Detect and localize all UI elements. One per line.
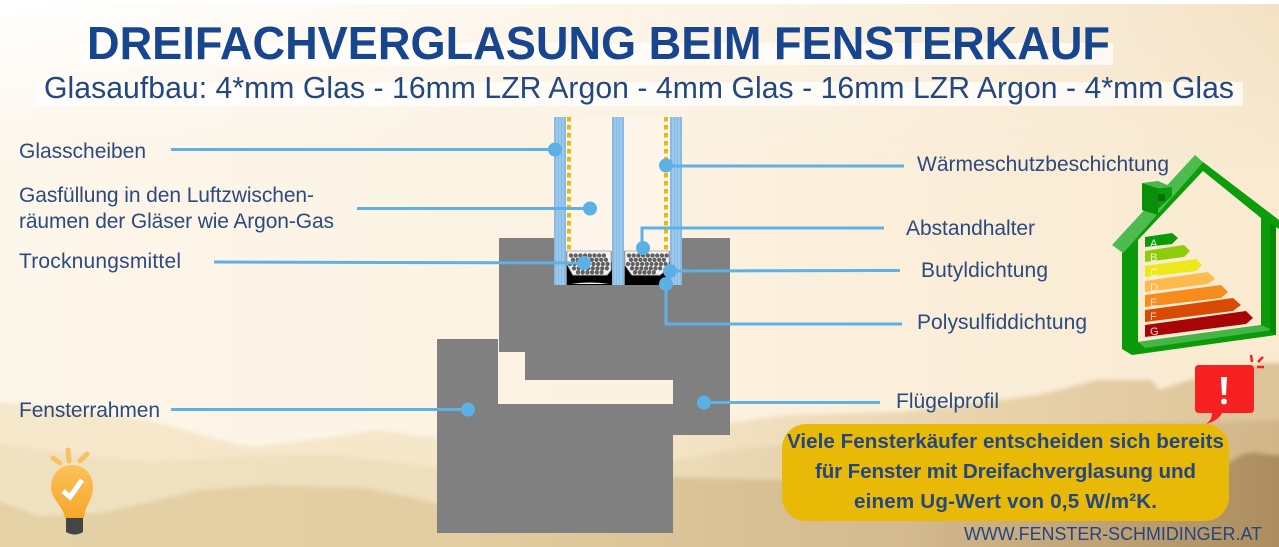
window frame — [437, 339, 673, 533]
chimney — [1142, 181, 1172, 215]
label: Glasscheiben: Glasscheiben — [19, 140, 146, 163]
gas-filled cavities — [566, 117, 670, 251]
label: Fensterrahmen: Fensterrahmen — [19, 399, 160, 422]
energy rating bars: C — [1150, 267, 1158, 279]
walls and floor — [1122, 215, 1276, 355]
spacer with desiccant, left — [567, 251, 612, 285]
callout: yellow note — [782, 424, 1229, 521]
energy rating bars: F — [1150, 311, 1157, 323]
label: Gasfüllung — [19, 184, 334, 233]
icon: light bulb with check — [51, 450, 93, 534]
spacer with desiccant, right — [625, 251, 670, 285]
label: Trocknungsmittel: Trocknungsmittel — [19, 250, 181, 273]
website url: WWW.FENSTER-SCHMIDINGER.AT — [964, 523, 1262, 544]
label: Wärmeschutzbeschichtung: Wärmeschutzbeschichtung — [917, 153, 1169, 176]
callout lines and dots — [171, 150, 904, 410]
label: Gasfüllung: Gasfüllung in den Luftzwischen- — [19, 184, 314, 207]
energy rating bars: A — [1150, 238, 1158, 250]
energy rating bars: D — [1150, 282, 1158, 294]
title: DREIFACHVERGLASUNG BEIM FENSTERKAUF — [87, 17, 1110, 69]
roof — [1123, 162, 1279, 253]
icon: energy efficiency house — [1112, 155, 1279, 355]
sash profile — [499, 238, 730, 435]
glass panes — [554, 117, 682, 285]
energy rating bars: B — [1150, 252, 1157, 264]
icon: red alert speech bubble — [1195, 355, 1264, 424]
callout: yellow note: Viele Fensterkäufer entscheiden sich bereits — [787, 430, 1224, 453]
label: Butyldichtung: Butyldichtung — [921, 259, 1048, 282]
callout: yellow note: einem Ug-Wert von 0,5 W/m²K. — [854, 490, 1157, 513]
energy rating bars — [1145, 233, 1253, 338]
low-e coating dashes — [569, 117, 666, 250]
label: Polysulfiddichtung: Polysulfiddichtung — [917, 311, 1087, 334]
callout: yellow note: für Fenster mit Dreifachverglasung und — [815, 460, 1196, 483]
energy rating bars: E — [1150, 297, 1157, 309]
window cross-section diagram — [437, 117, 730, 533]
subtitle: glass build-up: Glasaufbau: 4*mm Glas - 16mm LZR Argon - 4mm Glas - 16mm LZR Argon - 4*mm Glas — [44, 72, 1234, 105]
label: Abstandhalter: Abstandhalter — [906, 217, 1035, 240]
label: Flügelprofil: Flügelprofil — [896, 390, 999, 413]
energy rating bars: G — [1150, 326, 1159, 338]
label: Gasfüllung: räumen der Gläser wie Argon-Gas — [19, 210, 334, 233]
